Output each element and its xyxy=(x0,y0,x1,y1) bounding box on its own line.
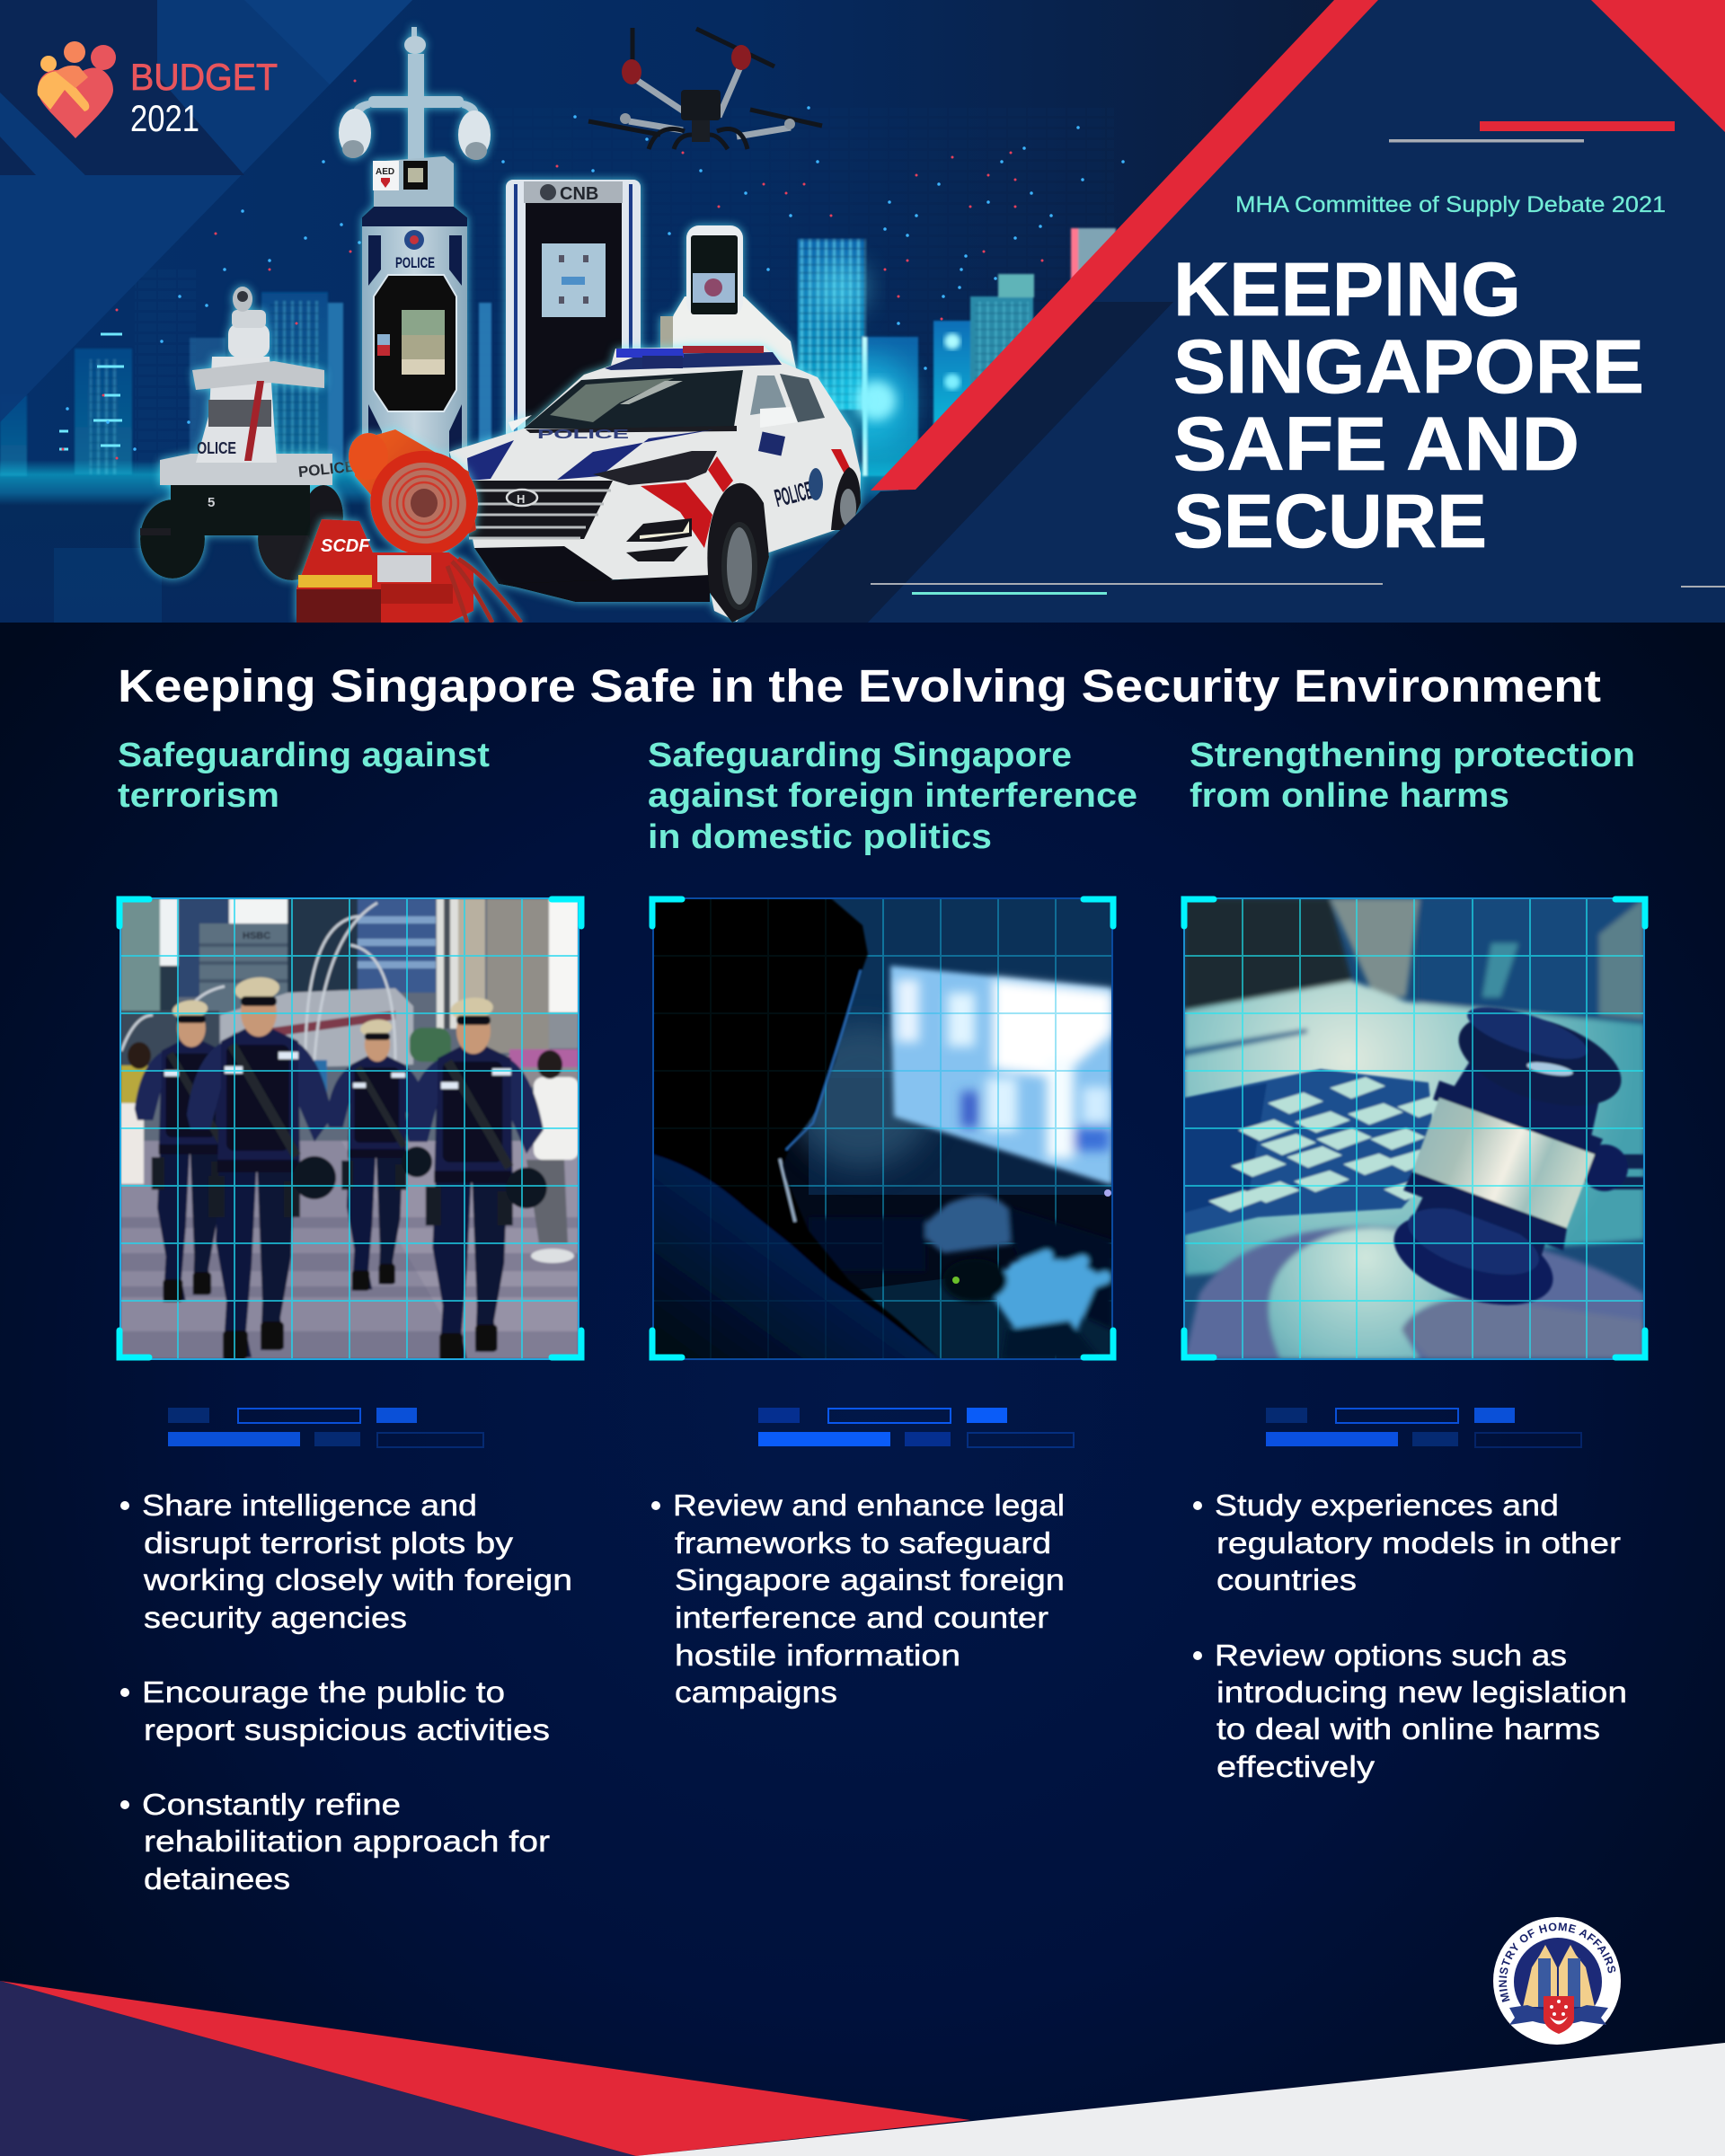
red accent bar xyxy=(1480,121,1675,131)
column 2 bullets: Review and enhance legal xyxy=(673,1489,1065,1522)
CNB label: CNB xyxy=(560,184,598,204)
photo 2: hooded hacker xyxy=(652,898,1113,1359)
column 3 bullets: introducing new legislation xyxy=(1216,1675,1627,1709)
red fan cannon xyxy=(296,429,521,623)
photo 1: police patrol xyxy=(119,898,581,1360)
column 2 bullets: campaigns xyxy=(675,1675,837,1709)
decorative data bars: column 1 xyxy=(168,1408,483,1447)
decorative data bars: column 2 xyxy=(758,1408,1074,1447)
crest shield xyxy=(1544,1996,1574,2034)
car red chevrons xyxy=(641,449,852,548)
main title: SAFE AND xyxy=(1173,402,1579,486)
crest lettering: MINISTRY OF HOME AFFAIRS xyxy=(1499,1922,1615,2002)
photo 3 grid xyxy=(1184,898,1644,1359)
Budget 2021 logo xyxy=(38,41,278,139)
car door badge xyxy=(758,432,823,512)
car wheels xyxy=(707,467,861,623)
column 3 heading: Strengthening protection xyxy=(1190,737,1635,774)
navy title panel xyxy=(867,0,1725,623)
column 3 heading xyxy=(1190,737,1635,815)
red corner triangle xyxy=(1591,0,1725,132)
column 3 heading: from online harms xyxy=(1190,777,1509,815)
photo 2 grid xyxy=(653,898,1112,1359)
subtitle: MHA Committee of Supply Debate 2021 xyxy=(1235,192,1666,217)
photo 1 grid xyxy=(120,898,579,1359)
column 3 bullets: effectively xyxy=(1216,1750,1376,1783)
column 1 heading: terrorism xyxy=(118,777,279,815)
CNB kiosk xyxy=(506,180,641,440)
bystanders xyxy=(120,1065,148,1105)
hacker hands xyxy=(809,1196,1112,1359)
main title: KEEPING xyxy=(1173,247,1521,331)
car hood stripes xyxy=(467,429,714,481)
column 3 bullets: Study experiences and xyxy=(1215,1489,1559,1522)
SCDF label: SCDF xyxy=(321,536,370,556)
photo 1 corner brackets xyxy=(119,899,581,1357)
header city background xyxy=(0,0,1348,623)
column 2 bullets: hostile information xyxy=(675,1639,960,1672)
column 1 bullets: security agencies xyxy=(144,1601,407,1634)
car grille: H xyxy=(517,492,525,506)
robot: 5 xyxy=(208,495,215,510)
laptop background xyxy=(1184,898,1644,1276)
laptop keyboard xyxy=(1184,1069,1453,1235)
gavel xyxy=(1383,996,1644,1322)
logo wordmark xyxy=(131,63,277,131)
main title: SINGAPORE xyxy=(1173,324,1644,409)
header geometric shapes xyxy=(0,0,412,422)
dark diagonal strip xyxy=(743,302,1173,623)
robot xyxy=(140,287,356,580)
column 2 heading xyxy=(648,737,1137,856)
column 1 bullets: Constantly refine xyxy=(142,1788,401,1821)
column 2 heading: against foreign interference xyxy=(648,777,1137,815)
police car xyxy=(449,346,861,623)
sound block xyxy=(1184,1226,1644,1359)
column 3 bullets xyxy=(1193,1489,1627,1783)
bottom accent lines xyxy=(871,583,1725,595)
robot: POLICE xyxy=(297,458,356,481)
header banner xyxy=(0,0,1725,623)
smart tower xyxy=(339,27,491,460)
column 3 bullets: countries xyxy=(1216,1563,1357,1596)
main title xyxy=(1173,247,1644,563)
hacker monitor xyxy=(890,966,1112,1185)
HSBC sign: HSBC xyxy=(243,931,270,941)
column 2 heading: in domestic politics xyxy=(648,818,992,856)
column 2 bullets: interference and counter xyxy=(675,1601,1048,1634)
robot label: OLICE xyxy=(197,439,236,457)
crest towers xyxy=(1523,1945,1595,2007)
photo 3: gavel and laptop xyxy=(1184,898,1645,1359)
column 1 bullets: disrupt terrorist plots by xyxy=(144,1526,514,1560)
column 3 bullets: regulatory models in other xyxy=(1216,1526,1621,1560)
AED label: AED xyxy=(376,167,394,177)
grey accent bar xyxy=(1389,139,1584,142)
Ministry of Home Affairs crest xyxy=(1493,1917,1621,2045)
column 3 bullets: Review options such as xyxy=(1215,1639,1567,1672)
car roof bar xyxy=(605,346,782,370)
police scanner kiosk xyxy=(660,225,798,377)
car headlight xyxy=(593,451,717,485)
column 1 bullets: Share intelligence and xyxy=(142,1489,477,1522)
column 1 bullets: Encourage the public to xyxy=(142,1675,505,1709)
logo wordmark: BUDGET xyxy=(130,56,278,98)
column 1 bullets: detainees xyxy=(144,1862,290,1895)
column 1 heading: Safeguarding against xyxy=(118,737,490,774)
column 2 heading: Safeguarding Singapore xyxy=(648,737,1072,774)
column 2 bullets xyxy=(651,1489,1065,1709)
column 1 bullets: working closely with foreign xyxy=(143,1563,572,1596)
logo wordmark: 2021 xyxy=(130,97,199,139)
car grille xyxy=(469,481,613,539)
photo 3 corner brackets xyxy=(1184,899,1645,1357)
column 1 heading xyxy=(118,737,490,815)
footer shapes xyxy=(0,1981,1725,2156)
red diagonal band xyxy=(871,0,1378,490)
drone xyxy=(588,28,822,149)
column 3 bullets: to deal with online harms xyxy=(1216,1712,1600,1745)
crest ribbon xyxy=(1509,2005,1608,2025)
main title: SECURE xyxy=(1173,479,1487,563)
column 2 bullets: frameworks to safeguard xyxy=(675,1526,1051,1560)
column 1 bullets xyxy=(120,1489,572,1895)
photo 2 corner brackets xyxy=(652,899,1113,1357)
decorative data bars: column 3 xyxy=(1266,1408,1581,1447)
hacker hood and jacket xyxy=(653,898,940,1359)
car hood lettering: POLICE xyxy=(537,427,629,442)
column 2 bullets: Singapore against foreign xyxy=(675,1563,1065,1596)
column 1 bullets: report suspicious activities xyxy=(144,1713,550,1746)
car door badge: POLICE xyxy=(772,476,815,512)
section heading: Keeping Singapore Safe in the Evolving Security Environment xyxy=(118,660,1601,711)
column 1 bullets: rehabilitation approach for xyxy=(144,1825,550,1858)
tower label: POLICE xyxy=(395,254,435,271)
